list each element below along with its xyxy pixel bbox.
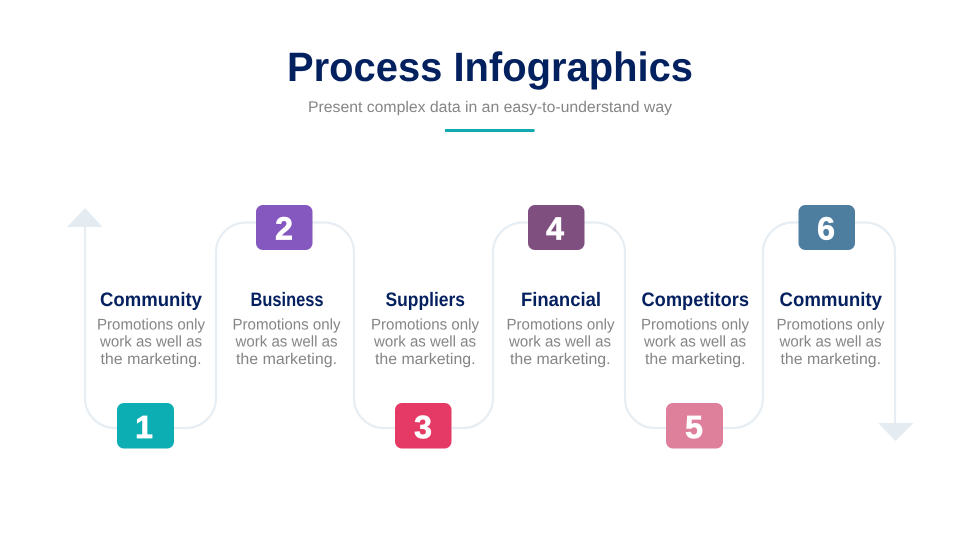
step 2 badge: 2 <box>275 210 293 246</box>
step 1 text: Community <box>97 289 205 368</box>
step 4 badge: 4 <box>546 210 564 246</box>
arrow head: start, pointing up <box>67 208 102 227</box>
step 5 text: Competitors: Promotions only <box>641 316 749 334</box>
step 4 text: Financial: Promotions only <box>506 316 615 334</box>
step 3 badge <box>395 403 452 448</box>
step 3 text: Suppliers: Suppliers <box>386 289 465 311</box>
step 2 text: Business: Business <box>250 289 324 311</box>
step 6 text: Community: Promotions only <box>776 316 885 334</box>
step 3 badge: 3 <box>414 409 432 445</box>
step 3 text: Suppliers: the marketing. <box>375 351 476 368</box>
step 6 text: Community: work as well as <box>779 334 882 350</box>
step 5 text: Competitors <box>641 289 749 368</box>
step 5 text: Competitors: work as well as <box>643 334 746 350</box>
step 6 text: Community: Community <box>780 289 882 311</box>
step 4 text: Financial: Financial <box>521 289 601 311</box>
step 2 text: Business: Promotions only <box>232 316 341 334</box>
step 4 badge <box>528 205 584 250</box>
step 2 badge <box>256 205 312 250</box>
step 6 text: Community: the marketing. <box>780 351 881 368</box>
step 6 badge <box>798 205 855 250</box>
step 2 text: Business <box>232 289 341 368</box>
step 3 text: Suppliers: Promotions only <box>371 316 479 334</box>
title underline <box>445 129 534 132</box>
step 1 text: Community: the marketing. <box>100 351 202 368</box>
arrow head: end, pointing down <box>878 423 914 441</box>
step 3 text: Suppliers <box>371 289 479 368</box>
subtitle: Present complex data in an easy-to-understand way <box>308 99 672 116</box>
step 5 text: Competitors: Competitors <box>642 289 749 311</box>
step 3 text: Suppliers: work as well as <box>373 334 476 350</box>
step 2 text: Business: the marketing. <box>236 351 337 368</box>
step 1 badge: 1 <box>135 409 153 445</box>
title: Process Infographics <box>287 44 693 90</box>
step 1 text: Community: work as well as <box>99 334 202 350</box>
step 1 text: Community: Community <box>100 289 202 311</box>
step 5 badge: 5 <box>685 409 703 445</box>
step 6 text: Community <box>776 289 885 368</box>
step 1 badge <box>117 403 174 448</box>
step 4 text: Financial: the marketing. <box>510 351 610 368</box>
step 2 text: Business: work as well as <box>235 334 338 350</box>
step 4 text: Financial: work as well as <box>508 334 611 350</box>
serpentine process path <box>85 222 895 428</box>
step 5 text: Competitors: the marketing. <box>645 351 746 368</box>
step 5 badge <box>666 403 723 448</box>
step 1 text: Community: Promotions only <box>97 316 205 334</box>
step 4 text: Financial <box>506 289 615 368</box>
step 6 badge: 6 <box>817 210 835 246</box>
